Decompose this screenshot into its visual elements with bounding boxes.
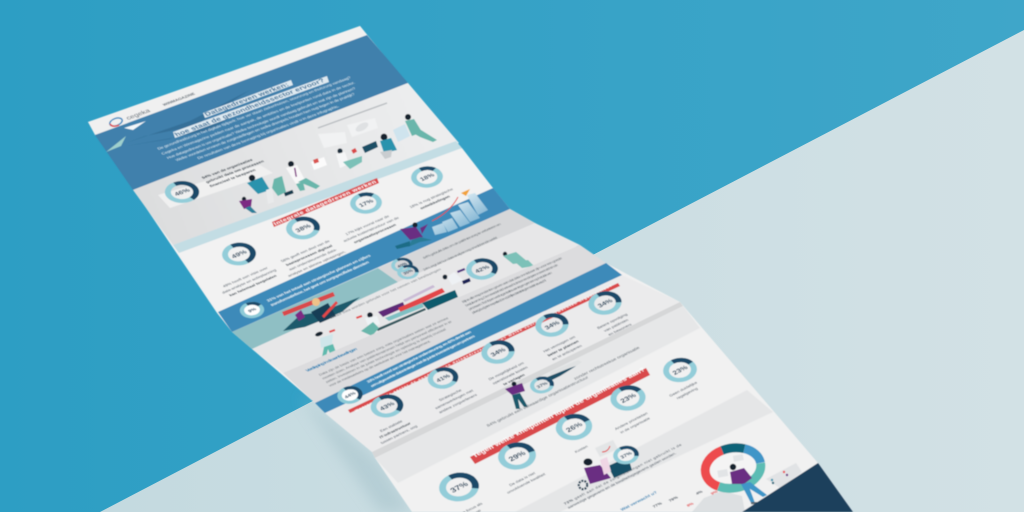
illustration: confused person [505, 360, 582, 409]
ring: 17% with text: actuele kostenstructuur van de [342, 215, 401, 243]
gray band: lower [515, 390, 773, 512]
ring: 37% large with text: 37% [448, 480, 471, 494]
heading: verdieping: Verdieping in de aanbevelingen [305, 347, 358, 373]
figure: person with bag [443, 268, 471, 285]
gray band under fold [375, 306, 700, 483]
body text left: voor de medewerkers op de werkvloer en voor het management. [328, 340, 432, 387]
ring: 42% [464, 257, 500, 281]
illustration: team in teal panel [283, 297, 360, 331]
body text left: Data zijn de basis van een betere zorg, mits organisaties weten wat ze ermee [318, 317, 449, 377]
ring: 23% A with text [608, 383, 653, 435]
ring: 38% with text: 58% geeft een deel van de [280, 239, 331, 263]
figure: kneeling nurse [503, 252, 534, 268]
ring: 38% with text: 38% [295, 223, 313, 234]
blue band: second [315, 263, 622, 413]
numbers row [652, 495, 679, 509]
body text right: processen. Toch lopen veel organisaties aan tegen grenzen op het vlak van [468, 271, 553, 311]
ring: 34% C with text: Betere opvolging [596, 312, 628, 330]
ring: 18% with text: 18% [419, 172, 436, 183]
ring: 29% with text: 29% [507, 449, 528, 463]
stat card: 46% [158, 155, 273, 208]
section: below second band [325, 275, 680, 452]
page shadow on lower left [300, 395, 412, 512]
ring: 41% with text [426, 366, 479, 414]
hero light panel [133, 83, 459, 245]
ring: 17% with text: organisatieprocessen [352, 222, 398, 244]
bar graph: gray mountain [686, 486, 745, 512]
ring: 18% with text [408, 165, 459, 213]
sheet base [88, 26, 853, 512]
ring: 38% with text: aan ondersteunende data- [288, 247, 339, 271]
gray panel: small rings [378, 209, 535, 282]
bar graph: gray mountain: 3% [722, 486, 731, 493]
ring: 34% A with text: De mogelijkheid om [487, 361, 526, 381]
illustration: person at laptop with gear [579, 440, 632, 489]
ring: 34% B with text: Het vermogen om [542, 334, 577, 353]
ring: 38% with text: hoewel nog niet altijd [300, 258, 341, 278]
card text: financieel te besparen [208, 168, 257, 188]
body text left: moeten doen. Analyse van patiëntenstromen helpt om personeel efficiënter in te [321, 320, 453, 380]
ring: 43% with text: tussen partners, oog [379, 424, 418, 445]
ring: 38% with text: analyse en slimme oplossingen, [287, 250, 347, 278]
bar chart: growth [432, 193, 488, 235]
header strip with logo [88, 26, 367, 135]
red label in teal panel [282, 292, 335, 316]
header partner name: WINMAGAZINE [162, 92, 196, 107]
ring: 41% with text: Strategische [438, 388, 463, 402]
ring: 38% with text: voor iedereen inzichtelijk [301, 261, 348, 283]
ring: 18% with text: ontwikkelingen [419, 194, 452, 210]
ring: 43% with text: 43% [379, 401, 396, 412]
text: lower band: aanwezige gegevens en de kwaliteitsgegevens gezien worden. [566, 451, 677, 510]
ring: 37% small [528, 375, 556, 395]
ring: 38% with text [275, 215, 354, 286]
figure: seated doctor [336, 148, 362, 169]
ring: 9% [238, 301, 266, 319]
ring: 43% with text: voor kwaliteit van zorg [382, 427, 424, 450]
ring: 17% with text: 17% [358, 198, 375, 209]
title: Datagedreven werken: [202, 81, 291, 118]
ring: 34% C with text: van patiënten [603, 318, 629, 333]
ring: 49% with text [217, 241, 281, 299]
figure: running man [395, 222, 432, 249]
title: hoe staat de gezondheidssector ervoor? [173, 77, 327, 138]
gray panel: conclusion text [283, 245, 606, 403]
arrow: red growth arrow [432, 197, 458, 221]
teal strip [173, 141, 462, 253]
ring: 29% with text [495, 440, 547, 494]
icon: teal plane [106, 136, 126, 152]
fold shadow strip [372, 302, 683, 458]
ring: 43% with text: IT-infrastructuur [378, 421, 412, 439]
blue band text: transformatiefase, het gaat om zorgspecifieke diensten [269, 260, 370, 307]
bar graph: gray mountain: 9% [710, 489, 719, 496]
ring: 34% B with text: beter te plannen [546, 339, 580, 357]
ring: 29% with text: De data is niet [508, 471, 537, 487]
ring: 23% B with text: Geen duidelijke [668, 380, 699, 398]
ring: 23% B with text: 23% [672, 364, 690, 376]
footer: dark panel [742, 463, 853, 512]
text: digital strategy line: zonder rechtstreekse organisatie [573, 345, 641, 381]
intro text block: Hoe datagedreven is uw organisatie? Welke technologie wordt vandaag gebruikt en wat zijn de plannen? [166, 86, 357, 160]
ring: 37% next to laptop: 37% [620, 451, 634, 460]
numbers row: 77% [652, 501, 663, 509]
body text left: zetten. Investeren in de juiste technologie en opleiding is daarbij cruciaal [325, 328, 447, 384]
ring: 41% with text: 41% [435, 373, 452, 384]
teal panel [232, 268, 398, 349]
ring: 34% C with text: 34% [597, 298, 614, 309]
mid gray panel [252, 223, 580, 373]
ring: 44% in band: 44% [344, 391, 358, 400]
donut chart [702, 443, 764, 493]
body text right: Bijna alle respondenten geven aan dat data onmisbaar zijn voor een goede [461, 257, 563, 304]
ring: 34% B with text: en te anticiperen [551, 344, 583, 361]
icon: paper plane [124, 121, 146, 130]
ring: 29% with text: onvoldoende kwaliteit [506, 472, 547, 494]
ring: 43% with text [369, 393, 424, 450]
ring: 18% with text: 18% is nog strategische [408, 187, 455, 209]
ring: 17% with text [338, 191, 405, 247]
ring: small A: 40% [396, 261, 408, 269]
ring: 34% A with text: 34% [490, 347, 507, 358]
ring: 49% with text: 49% heeft een visie over [222, 265, 269, 288]
bar graph: gray mountain: 8% [686, 501, 695, 508]
small ring text: 24% zegt dat hun data-analyse nog onvoldoende werkt [422, 236, 499, 272]
ring: 34% C with text: en bewoners [607, 322, 633, 337]
red heading: integrale datagedreven werken: Integrale datagedreven werken [273, 180, 378, 227]
ring: 34% B with text: 34% [544, 320, 561, 331]
blue band text: een uitgewerkte datastrategie met de juiste investeringen en partners [369, 334, 477, 388]
ring: 37% large with text [436, 470, 487, 512]
ring: 34% A with text: te verlagen [502, 372, 526, 386]
intro text block: Cegeka en Winmagazine peilden naar de aanpak, de ambities en de knelpunten rond data in de sector. [160, 80, 356, 156]
illustration: family with plant [239, 175, 294, 213]
red heading: knelpunten: Tegen welke knelpunten lopen de organisaties aan? [472, 367, 647, 459]
ring: 9%: 9% [247, 307, 258, 314]
ring: 42%: 42% [474, 264, 491, 275]
text: lower band: 73% geeft aan dat de zorginstellingen niet gebruikt is de [563, 442, 683, 506]
body text right: privacy, budget en expertise. Een duidelijke datastrategie maakt het verschil [471, 279, 547, 314]
ring: small B [396, 264, 420, 280]
ring: small B: 35% [402, 268, 414, 276]
ring: 46%: 46% [173, 188, 192, 197]
numbers row: 79% [668, 495, 679, 503]
small ring text: 64% gebruikt data om de patiëntenzorg te verbeteren en [422, 223, 502, 260]
blue band: runner section [218, 188, 510, 332]
figure: standing man [315, 329, 337, 357]
illustration: circular dashboard [530, 276, 600, 338]
plane shadows [126, 90, 262, 146]
ring: 23% A with text: in de organisatie [619, 416, 652, 434]
red heading: long band: Waarom ziet de sector de noodzaak van datagedreven werken? Welke voordelen verwachten organisaties? [354, 284, 613, 412]
ring: 23% B with text [661, 356, 703, 402]
body text right: besluitvorming. De meerderheid verwacht de komende jaren meer inzicht in de [464, 264, 559, 307]
text: share of organisations: 84% gebruikt een volwaardige organisatiestructuur [486, 375, 590, 428]
intro text block: De gezondheidszorg in het digitale tijdperk: hoe ver staan ziekenhuizen, woonzorg en thuiszorg vandaag? [156, 75, 353, 151]
ring: 43% with text: Een stabiele [379, 419, 404, 433]
blue band text: 31% van het totaal aan strategische plannen en cijfers [266, 253, 372, 303]
ring: 37% next to laptop [611, 444, 641, 466]
card text: 54% van de organisaties [201, 157, 254, 180]
figure: computer desk [362, 141, 378, 153]
icon: trophy figure [461, 189, 470, 196]
stacked bar chart [376, 285, 458, 331]
ring: 34% B with text [533, 311, 585, 362]
figure: man in front of donut [730, 464, 767, 504]
heading: blue question: Wat verwacht u? [620, 490, 658, 512]
section: white stats panel [179, 148, 493, 312]
intro text block: De resultaten van deze bevraging bij organisaties vindt u in deze infographic. [196, 104, 340, 160]
blue band text: 33% heeft nood aan strategische ondersteuning, en 42% denkt aan [366, 330, 473, 384]
ring: 41% with text: andere zorgverleners [438, 393, 478, 414]
bar graph: gray mountain: 4% [695, 489, 704, 496]
ring: small A [390, 257, 414, 273]
hero blue panel [95, 35, 408, 190]
ring: 17% with text: 17% kijkt vooral naar de [344, 214, 391, 236]
infographic sheet [88, 26, 853, 512]
ring: 23% A with text: Andere prioriteiten [614, 411, 649, 431]
chart axis label: Welke data worden gebruikt voor het nemen van beslissingen [329, 268, 442, 320]
ring: 49% with text: data-analyse en actieplanning [221, 268, 277, 294]
card text: gebruikt data om processen [204, 159, 265, 184]
ring: 26% with text [553, 412, 595, 454]
ring: 37% small: 37% [536, 381, 550, 390]
ring: 49% with text: kan helemaal toegelaten [228, 273, 278, 297]
ring: 34% A with text [479, 338, 533, 390]
ring: 44% in band [336, 385, 364, 405]
ring: 23% A with text: 23% [618, 391, 638, 405]
figure: seated analyst with tablet [356, 312, 380, 336]
figure: seated woman [380, 134, 397, 159]
ring: 38% with text: basisprocessen digitaal [285, 244, 333, 267]
illustration: office scene [318, 103, 437, 169]
logo: cegeka swirl [109, 116, 123, 128]
ring: 34% A with text: operationele kosten [491, 365, 529, 385]
intro text block: Welke voordelen ervaren de zorginstellingen en welke drempels houden hen nog tegen in de praktijk? [174, 92, 357, 162]
illustration: doctor standing [286, 157, 327, 191]
ring: 34% C with text [586, 289, 636, 338]
ring: 26% with text: Kosten [573, 444, 589, 454]
card text [201, 155, 269, 188]
logo wordmark: cegeka [125, 108, 152, 121]
figure: standing nurse [405, 114, 437, 142]
ring: 49% with text: 49% [231, 249, 249, 260]
ring: 23% B with text: regelgeving [675, 386, 699, 400]
card: legend panel [766, 463, 802, 488]
ring: 26% with text: 26% [564, 420, 584, 434]
ring: 41% with text: samenwerkingen met [434, 388, 475, 410]
